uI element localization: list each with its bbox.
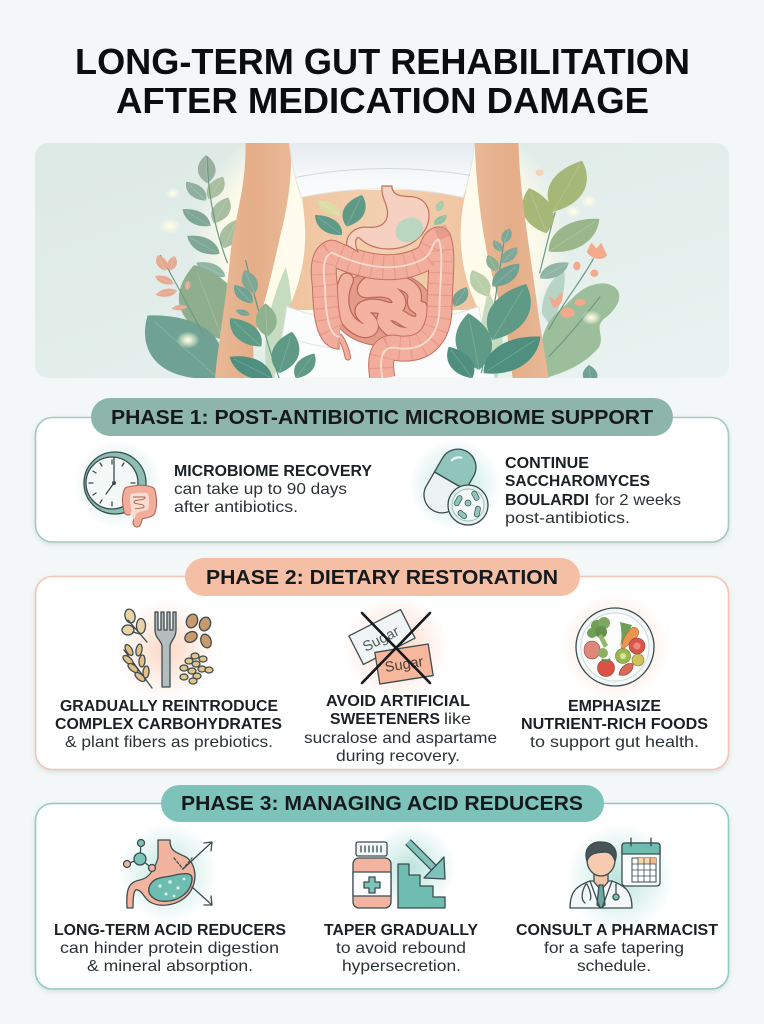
appendix <box>340 337 348 357</box>
text: continue saccharomyces boulardi: CONTINUE <box>505 455 589 472</box>
phase 1 heading: PHASE 1: POST-ANTIBIOTIC MICROBIOME SUPPORT <box>111 406 653 429</box>
text: continue saccharomyces boulardi: BOULARDI <box>505 492 589 509</box>
text: nutrient-rich foods <box>521 698 708 751</box>
text: long-term acid reducers: LONG-TERM ACID REDUCERS <box>54 922 286 939</box>
text: continue saccharomyces boulardi <box>505 455 681 527</box>
belly leaves <box>342 195 366 227</box>
phase 3 heading <box>161 785 604 822</box>
icon: clock with intestine <box>74 440 162 528</box>
text: complex carbohydrates: GRADUALLY REINTRODUCE <box>60 698 278 715</box>
icon: plate of vegetables <box>561 593 669 701</box>
text: long-term acid reducers <box>54 922 286 975</box>
icon: crossed-out sugar packets <box>344 596 448 700</box>
phase 2 heading <box>185 558 580 596</box>
text: continue saccharomyces boulardi: for 2 weeks <box>595 492 681 509</box>
icon: stomach with acid and molecule <box>118 823 218 923</box>
front right branch <box>481 230 506 373</box>
icon: pharmacist and calendar <box>566 824 674 932</box>
hero illustration: torso with digestive system and botanicals <box>35 143 729 378</box>
torso <box>288 190 479 310</box>
text: avoid artificial sweeteners: SWEETENERS <box>330 711 440 728</box>
icon: fork, grains and legumes <box>116 600 216 700</box>
right arm <box>475 143 549 378</box>
text: taper gradually: hypersecretion. <box>342 958 461 975</box>
text: complex carbohydrates: COMPLEX CARBOHYDRATES <box>55 716 282 733</box>
stomach <box>347 186 429 252</box>
text: long-term acid reducers: & mineral absorption. <box>87 958 253 975</box>
icon: crossed-out sugar packets: Sugar <box>384 654 425 676</box>
text: microbiome recovery: MICROBIOME RECOVERY <box>174 463 372 480</box>
text: nutrient-rich foods: NUTRIENT-RICH FOODS <box>521 716 708 733</box>
shorts <box>275 307 495 378</box>
text: microbiome recovery: can take up to 90 days <box>174 481 347 498</box>
title <box>75 41 690 121</box>
icon: crossed-out sugar packets: Sugar <box>360 624 402 656</box>
text: avoid artificial sweeteners: during recovery. <box>336 748 460 765</box>
front left branch <box>246 260 279 378</box>
large intestine <box>324 239 441 378</box>
top garment <box>290 143 475 197</box>
text: avoid artificial sweeteners: AVOID ARTIFICIAL <box>326 693 470 710</box>
text: avoid artificial sweeteners: sucralose and aspartame <box>304 730 497 747</box>
icon: medicine bottle and descending stairs <box>353 824 456 912</box>
text: avoid artificial sweeteners <box>304 693 497 765</box>
phase 3 heading: PHASE 3: MANAGING ACID REDUCERS <box>181 792 583 815</box>
text: taper gradually: to avoid rebound <box>336 940 466 957</box>
text: complex carbohydrates <box>55 698 282 751</box>
panel: phase 3 <box>36 785 728 989</box>
title: AFTER MEDICATION DAMAGE <box>116 80 649 121</box>
phase 1 heading <box>91 398 673 436</box>
text: taper gradually: TAPER GRADUALLY <box>324 922 478 939</box>
text: continue saccharomyces boulardi: post-antibiotics. <box>505 510 630 527</box>
small intestine <box>340 276 428 346</box>
sparkles <box>162 220 178 232</box>
text: long-term acid reducers: can hinder protein digestion <box>60 940 279 957</box>
icon: capsule and microbe <box>409 439 501 531</box>
phase 2 heading: PHASE 2: DIETARY RESTORATION <box>206 566 558 589</box>
text: avoid artificial sweeteners: like <box>444 711 471 728</box>
panel: phase 1 <box>36 398 728 542</box>
text: consult a pharmacist <box>516 922 718 975</box>
left arm <box>215 143 291 378</box>
title: LONG-TERM GUT REHABILITATION <box>75 41 690 82</box>
text: consult a pharmacist: CONSULT A PHARMACIST <box>516 922 718 939</box>
text: nutrient-rich foods: to support gut health. <box>530 734 699 751</box>
text: consult a pharmacist: schedule. <box>577 958 651 975</box>
panel: phase 2 <box>36 558 728 770</box>
text: taper gradually <box>324 922 478 975</box>
text: consult a pharmacist: for a safe tapering <box>544 940 684 957</box>
text: microbiome recovery: after antibiotics. <box>174 499 298 516</box>
text: nutrient-rich foods: EMPHASIZE <box>568 698 661 715</box>
text: microbiome recovery <box>174 463 372 516</box>
text: complex carbohydrates: & plant fibers as prebiotics. <box>65 734 273 751</box>
text: continue saccharomyces boulardi: SACCHAROMYCES <box>505 473 650 490</box>
